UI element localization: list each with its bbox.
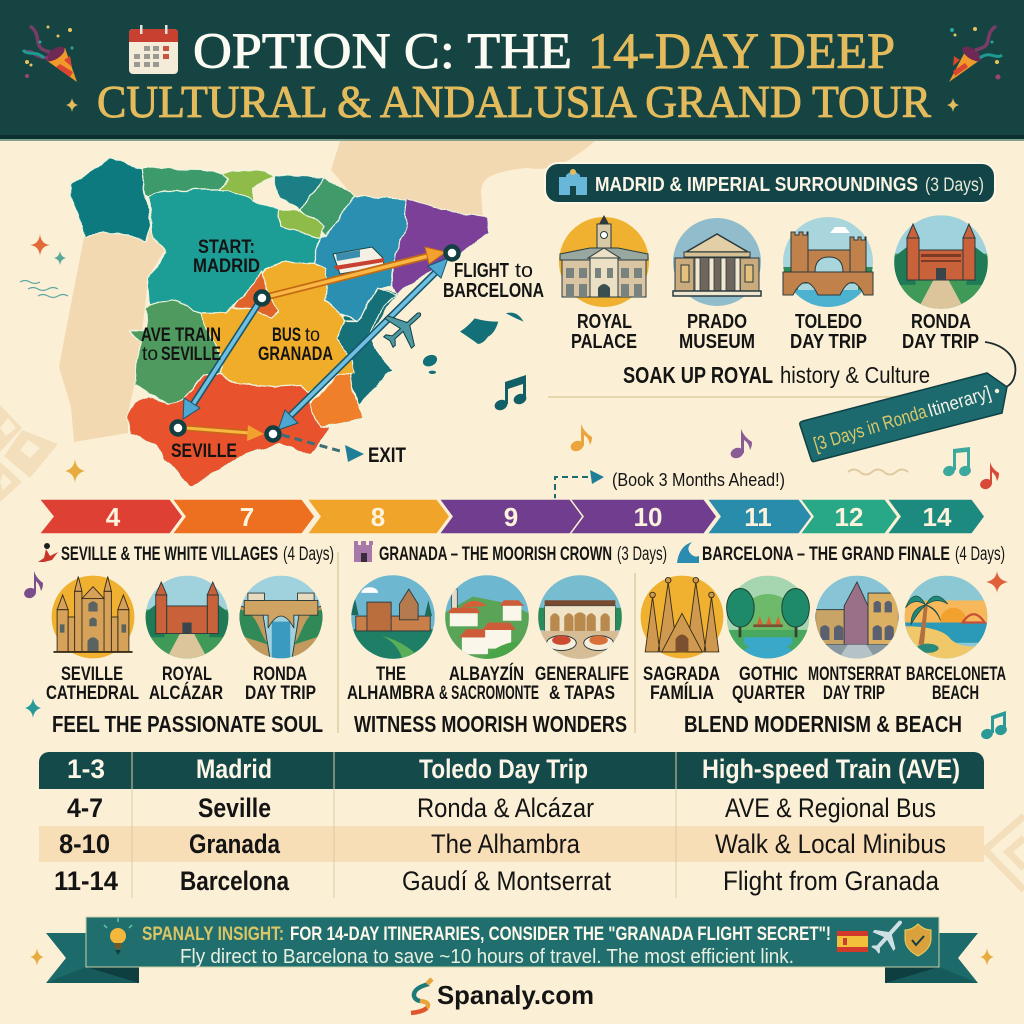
day 11: 11 <box>744 502 772 532</box>
labels: Granada attractions: ALBAYZÍN <box>449 662 524 685</box>
labels: Barcelona attractions: BEACH <box>932 682 979 704</box>
icon: Generalife and tapas <box>538 575 622 659</box>
icon: Seville Cathedral <box>52 576 134 658</box>
labels: Madrid attractions: RONDA <box>911 311 971 333</box>
labels: Granada attractions: ALHAMBRA <box>347 682 435 704</box>
labels: Madrid attractions <box>571 311 979 353</box>
labels: Madrid attractions: DAY TRIP <box>790 331 867 353</box>
label: AVE train <box>141 325 221 365</box>
background lattice pattern right <box>985 816 1024 890</box>
labels: Madrid attractions: PRADO <box>687 311 747 333</box>
labels: Seville attractions: SEVILLE <box>61 663 123 685</box>
icon: calendar <box>129 25 178 74</box>
icon: shield <box>905 924 931 956</box>
insight headline: SPANALY INSIGHT: <box>142 924 284 945</box>
route arrow: exit dashed <box>282 435 364 462</box>
table header row <box>39 752 984 789</box>
label: flight to Barcelona: FLIGHT <box>454 260 509 282</box>
insight headline: FOR 14-DAY ITINERARIES, CONSIDER THE "GRANADA FLIGHT SECRET"! <box>290 924 831 945</box>
label: Seville: SEVILLE <box>171 441 237 462</box>
icon: Montserrat <box>816 576 898 658</box>
label: start Madrid: MADRID <box>193 256 260 277</box>
tagline: modernism and beach: BLEND MODERNISM & BEACH <box>684 711 962 737</box>
day 9: 9 <box>504 502 518 532</box>
icon: plane <box>375 298 434 357</box>
labels: Madrid attractions: PALACE <box>571 331 637 353</box>
table row: Granada <box>59 829 946 859</box>
table header row: High-speed Train (AVE) <box>702 754 960 784</box>
day 14: 14 <box>923 502 952 532</box>
day 7 <box>172 499 315 534</box>
label: bus to Granada: BUS <box>272 325 301 346</box>
labels: Barcelona attractions: DAY TRIP <box>823 682 885 704</box>
icon: party popper right <box>949 26 1002 82</box>
map of Spain with route <box>59 141 595 487</box>
panel heading: MADRID & IMPERIAL SURROUNDINGS <box>595 174 918 196</box>
table row: Barcelona: 11-14 <box>54 866 118 896</box>
booking note: (Book 3 Months Ahead!) <box>612 470 785 490</box>
icon: Spanish flag <box>837 931 868 952</box>
section heading: (3 Days) <box>617 544 667 565</box>
table row: Barcelona: Gaudí & Montserrat <box>402 866 611 896</box>
neighbouring land: Portugal and France <box>59 141 595 442</box>
labels: Granada attractions <box>347 662 629 704</box>
icon: light bulb <box>104 918 132 955</box>
labels: Barcelona attractions: GOTHIC <box>739 663 798 685</box>
label: bus to Granada <box>258 325 333 365</box>
labels: Madrid attractions: MUSEUM <box>679 331 755 353</box>
labels: Madrid attractions: DAY TRIP <box>902 331 979 353</box>
label: start Madrid: START: <box>198 237 255 258</box>
label: AVE train: AVE TRAIN <box>141 325 221 346</box>
table row: Seville: Ronda & Alcázar <box>417 793 594 823</box>
day 9 <box>439 499 585 534</box>
section heading: SEVILLE & THE WHITE VILLAGES <box>61 544 278 565</box>
route arrow: Madrid to Barcelona <box>262 247 446 298</box>
tagline: soak up royal <box>623 362 930 388</box>
table row: Barcelona: Flight from Granada <box>723 866 940 896</box>
label: bus to Granada: GRANADA <box>258 344 333 365</box>
icon: party popper left <box>23 26 77 82</box>
labels: Barcelona attractions: MONTSERRAT <box>808 663 901 685</box>
labels: Seville attractions: RONDA <box>253 663 307 685</box>
label: start Madrid <box>193 237 260 277</box>
day 8 <box>307 499 450 534</box>
icon: plane <box>865 912 912 960</box>
section heading: GRANADA – THE MOORISH CROWN <box>379 544 612 565</box>
icon: wave <box>677 542 699 563</box>
icon: Ronda palace <box>894 215 988 309</box>
label: AVE train: to <box>142 344 158 365</box>
section heading: BARCELONA – THE GRAND FINALE <box>702 544 950 565</box>
panel heading <box>544 162 996 204</box>
table row: Seville: Seville <box>198 793 271 823</box>
day 14 <box>887 499 985 534</box>
day 11 <box>707 499 812 534</box>
title line 1: OPTION C: THE <box>193 24 572 80</box>
icon: flamenco dancer <box>38 543 58 562</box>
panel: Madrid & imperial surroundings <box>544 162 1015 462</box>
header banner <box>0 0 1024 141</box>
logo: Spanaly.com: Spanaly.com <box>437 980 594 1010</box>
panel: Barcelona the grand finale <box>641 542 1006 737</box>
day 7: 7 <box>240 502 254 532</box>
label: flight to Barcelona <box>443 260 544 302</box>
title line 2: CULTURAL & ANDALUSIA GRAND TOUR <box>97 77 931 127</box>
tagline: Moorish wonders: WITNESS MOORISH WONDERS <box>354 711 627 737</box>
icon: Albayzin <box>445 575 529 659</box>
table header row: Madrid <box>196 754 272 784</box>
icon: Prado Museum <box>673 218 761 306</box>
label: AVE train: SEVILLE <box>161 344 221 365</box>
labels: Barcelona attractions: FAMÍLIA <box>650 681 714 704</box>
labels: Madrid attractions: TOLEDO <box>795 311 862 333</box>
itinerary tag <box>800 342 1015 462</box>
route arrow: Madrid to Seville <box>183 304 258 419</box>
labels: Granada attractions: & TAPAS <box>549 682 615 704</box>
labels: Seville attractions: CATHEDRAL <box>46 682 139 704</box>
panel: Seville and the white villages <box>38 543 334 737</box>
icon: Barceloneta beach <box>905 576 987 658</box>
itinerary tag: Itinerary] <box>925 383 994 422</box>
labels: Barcelona attractions <box>643 663 1006 704</box>
insight headline <box>142 924 831 945</box>
icon: castle <box>354 541 373 562</box>
icon: Sagrada Familia <box>641 576 723 658</box>
label: flight to Barcelona: BARCELONA <box>443 280 544 302</box>
icon: Gothic Quarter <box>727 576 809 658</box>
logo mark <box>411 979 432 1013</box>
labels: Granada attractions: GENERALIFE <box>535 663 629 685</box>
day 10 <box>570 499 717 534</box>
insight ribbon banner <box>46 912 978 983</box>
day 8: 8 <box>371 502 385 532</box>
table row: Barcelona <box>54 866 940 896</box>
labels: Madrid attractions: ROYAL <box>577 311 632 333</box>
section heading: (4 Days) <box>283 544 334 565</box>
table row: Granada: The Alhambra <box>431 829 581 859</box>
table row: Seville: 4-7 <box>67 793 103 823</box>
labels: Barcelona attractions: QUARTER <box>732 682 805 704</box>
icon: Royal Alcazar <box>146 576 228 658</box>
icon: Toledo castle bridge <box>783 217 873 307</box>
icon: The Alhambra <box>351 575 435 659</box>
labels: Seville attractions: ROYAL <box>162 663 212 685</box>
table row: Granada: Granada <box>189 829 281 859</box>
labels: Seville attractions <box>46 663 316 704</box>
labels: Seville attractions: DAY TRIP <box>245 682 316 704</box>
regions of Spain <box>71 158 490 487</box>
Balearic islands <box>421 313 524 374</box>
route nodes <box>172 246 458 440</box>
labels: Granada attractions: THE <box>376 663 406 685</box>
waves <box>20 280 908 474</box>
table header row: 1-3 <box>67 754 105 784</box>
day 4 <box>39 499 183 534</box>
background lattice pattern left <box>0 405 58 502</box>
icon: Ronda bridge <box>240 576 322 658</box>
labels: Barcelona attractions: SAGRADA <box>643 663 720 685</box>
tagline: soak up royal: SOAK UP ROYAL <box>623 362 773 388</box>
table row: Granada: Walk & Local Minibus <box>715 829 946 859</box>
timeline chevrons <box>39 499 985 534</box>
labels: Granada attractions: & SACROMONTE <box>439 682 539 704</box>
label: flight to Barcelona: to <box>515 260 533 282</box>
icon: train <box>333 247 386 277</box>
day 12 <box>800 499 898 534</box>
table row: Granada: 8-10 <box>59 829 110 859</box>
tagline: soak up royal: history & Culture <box>780 362 930 388</box>
table header row: Toledo Day Trip <box>419 754 588 784</box>
day 12: 12 <box>835 502 863 532</box>
label: bus to Granada: to <box>305 325 320 346</box>
map-side sparkles <box>25 234 1008 966</box>
tagline: passionate soul: FEEL THE PASSIONATE SOUL <box>52 711 323 737</box>
music notes <box>23 375 1008 741</box>
table row: Barcelona: Barcelona <box>180 866 290 896</box>
title sparkles <box>66 98 959 112</box>
title line 1 <box>193 24 895 80</box>
route arrow: Seville to Granada <box>186 425 264 441</box>
route arrow: Granada to Barcelona <box>278 258 448 430</box>
table row: Seville: AVE & Regional Bus <box>725 793 936 823</box>
label: exit: EXIT <box>368 444 406 467</box>
table row: Seville <box>67 793 936 823</box>
labels: Seville attractions: ALCÁZAR <box>149 681 223 704</box>
panel heading: (3 Days) <box>925 175 984 196</box>
ribbon tails <box>46 933 978 983</box>
itinerary table <box>39 752 984 898</box>
day 10: 10 <box>634 502 662 532</box>
itinerary tag: [3 Days in Ronda <box>811 401 930 456</box>
insight body: Fly direct to Barcelona to save ~10 hours of travel. The most efficient link. <box>180 946 794 968</box>
title line 1: 14-DAY DEEP <box>588 24 895 80</box>
decorative sparkles, notes and waves <box>20 234 1008 966</box>
day 4: 4 <box>106 502 121 532</box>
panel: Granada the Moorish crown <box>347 541 667 737</box>
icon: Royal Palace <box>559 215 649 307</box>
icon: palace <box>559 169 587 195</box>
booking note <box>555 470 785 500</box>
